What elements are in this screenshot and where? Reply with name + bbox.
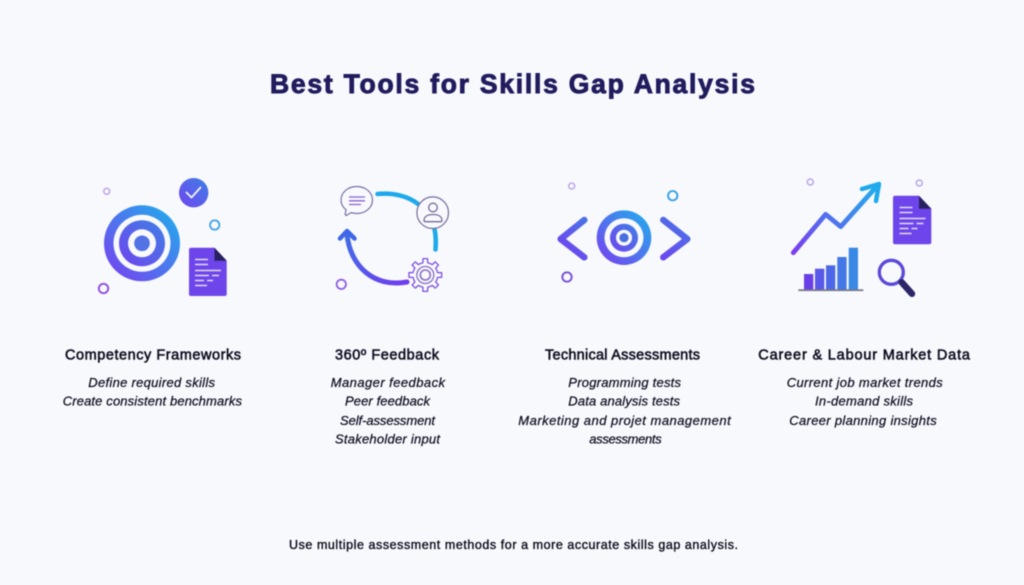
panel: technical assessments (518, 183, 732, 446)
bullet list: In-demand skills (815, 394, 914, 409)
bullet list: Stakeholder input (335, 432, 441, 446)
heading: 360º Feedback (335, 347, 440, 363)
bullet list: Marketing and projet management (518, 413, 732, 428)
bullet list: Current job market trends (787, 375, 943, 390)
bullet list: Manager feedback (331, 375, 446, 390)
icon: trend arrow, bar chart, document, magnifier (793, 179, 931, 294)
bullet list (518, 375, 732, 446)
title: Best Tools for Skills Gap Analysis (270, 69, 755, 99)
bullet list: assessments (589, 432, 662, 446)
heading: Technical Assessments (545, 347, 700, 363)
footer note: Use multiple assessment methods for a more accurate skills gap analysis. (289, 538, 738, 552)
bullet list: Define required skills (88, 375, 216, 390)
panel: career and labour market data (758, 179, 971, 428)
bullet list: Peer feedback (345, 394, 432, 409)
bullet list: Data analysis tests (568, 394, 680, 409)
bullet list: Programming tests (568, 375, 682, 390)
heading: Competency Frameworks (65, 347, 241, 363)
bullet list (787, 375, 943, 428)
bullet list (63, 375, 243, 409)
bullet list: Self-assessment (340, 413, 436, 428)
panel: 360 feedback (331, 186, 449, 446)
bullet list: Create consistent benchmarks (63, 394, 243, 409)
icon: code brackets with target (561, 183, 687, 282)
panel: competency frameworks (63, 178, 243, 409)
bullet list: Career planning insights (789, 413, 937, 428)
heading: Career & Labour Market Data (758, 347, 971, 363)
icon: feedback cycle (337, 186, 449, 291)
icon: target with check and document (99, 178, 227, 296)
bullet list (331, 375, 446, 446)
